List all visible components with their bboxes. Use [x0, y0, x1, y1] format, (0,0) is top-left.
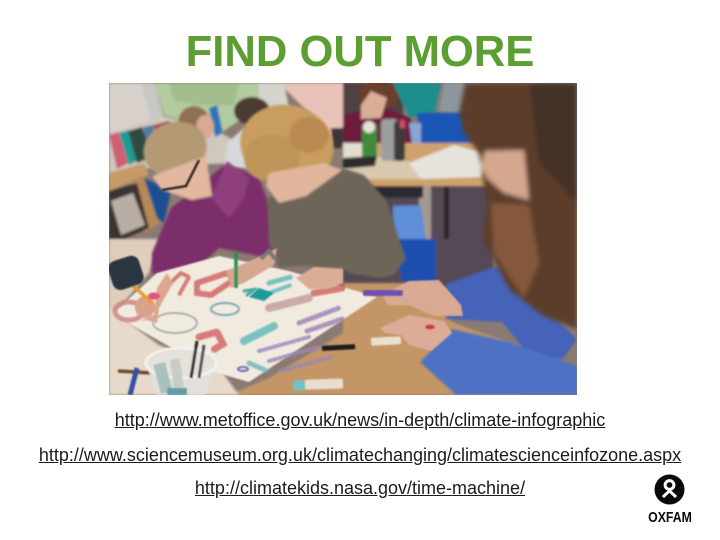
link: Science Museum: http://www.sciencemuseum.org.uk/climatechanging/climatescienceinfozone.aspx	[39, 445, 681, 465]
hands and coloured pens	[106, 248, 463, 395]
boy with blond hair	[233, 96, 406, 278]
girl in blue on the right	[420, 266, 577, 395]
table	[109, 239, 563, 395]
girl's glasses	[162, 160, 199, 190]
logo emblem	[654, 474, 684, 504]
girl with glasses	[136, 113, 279, 278]
poster with climate doodles	[112, 256, 377, 382]
girl's long hair and face	[459, 83, 577, 329]
link: NASA Climate Kids: http://climatekids.nasa.gov/time-machine/	[195, 478, 525, 498]
logo: Oxfam	[648, 474, 692, 526]
title: FIND OUT MORE	[186, 28, 534, 76]
photo: children drawing a climate mind map	[109, 83, 577, 395]
logo wordmark: OXFAM	[648, 509, 692, 526]
pen pot	[146, 341, 216, 395]
link: Met Office: http://www.metoffice.gov.uk/news/in-depth/climate-infographic	[115, 410, 605, 430]
classroom background	[109, 80, 494, 288]
